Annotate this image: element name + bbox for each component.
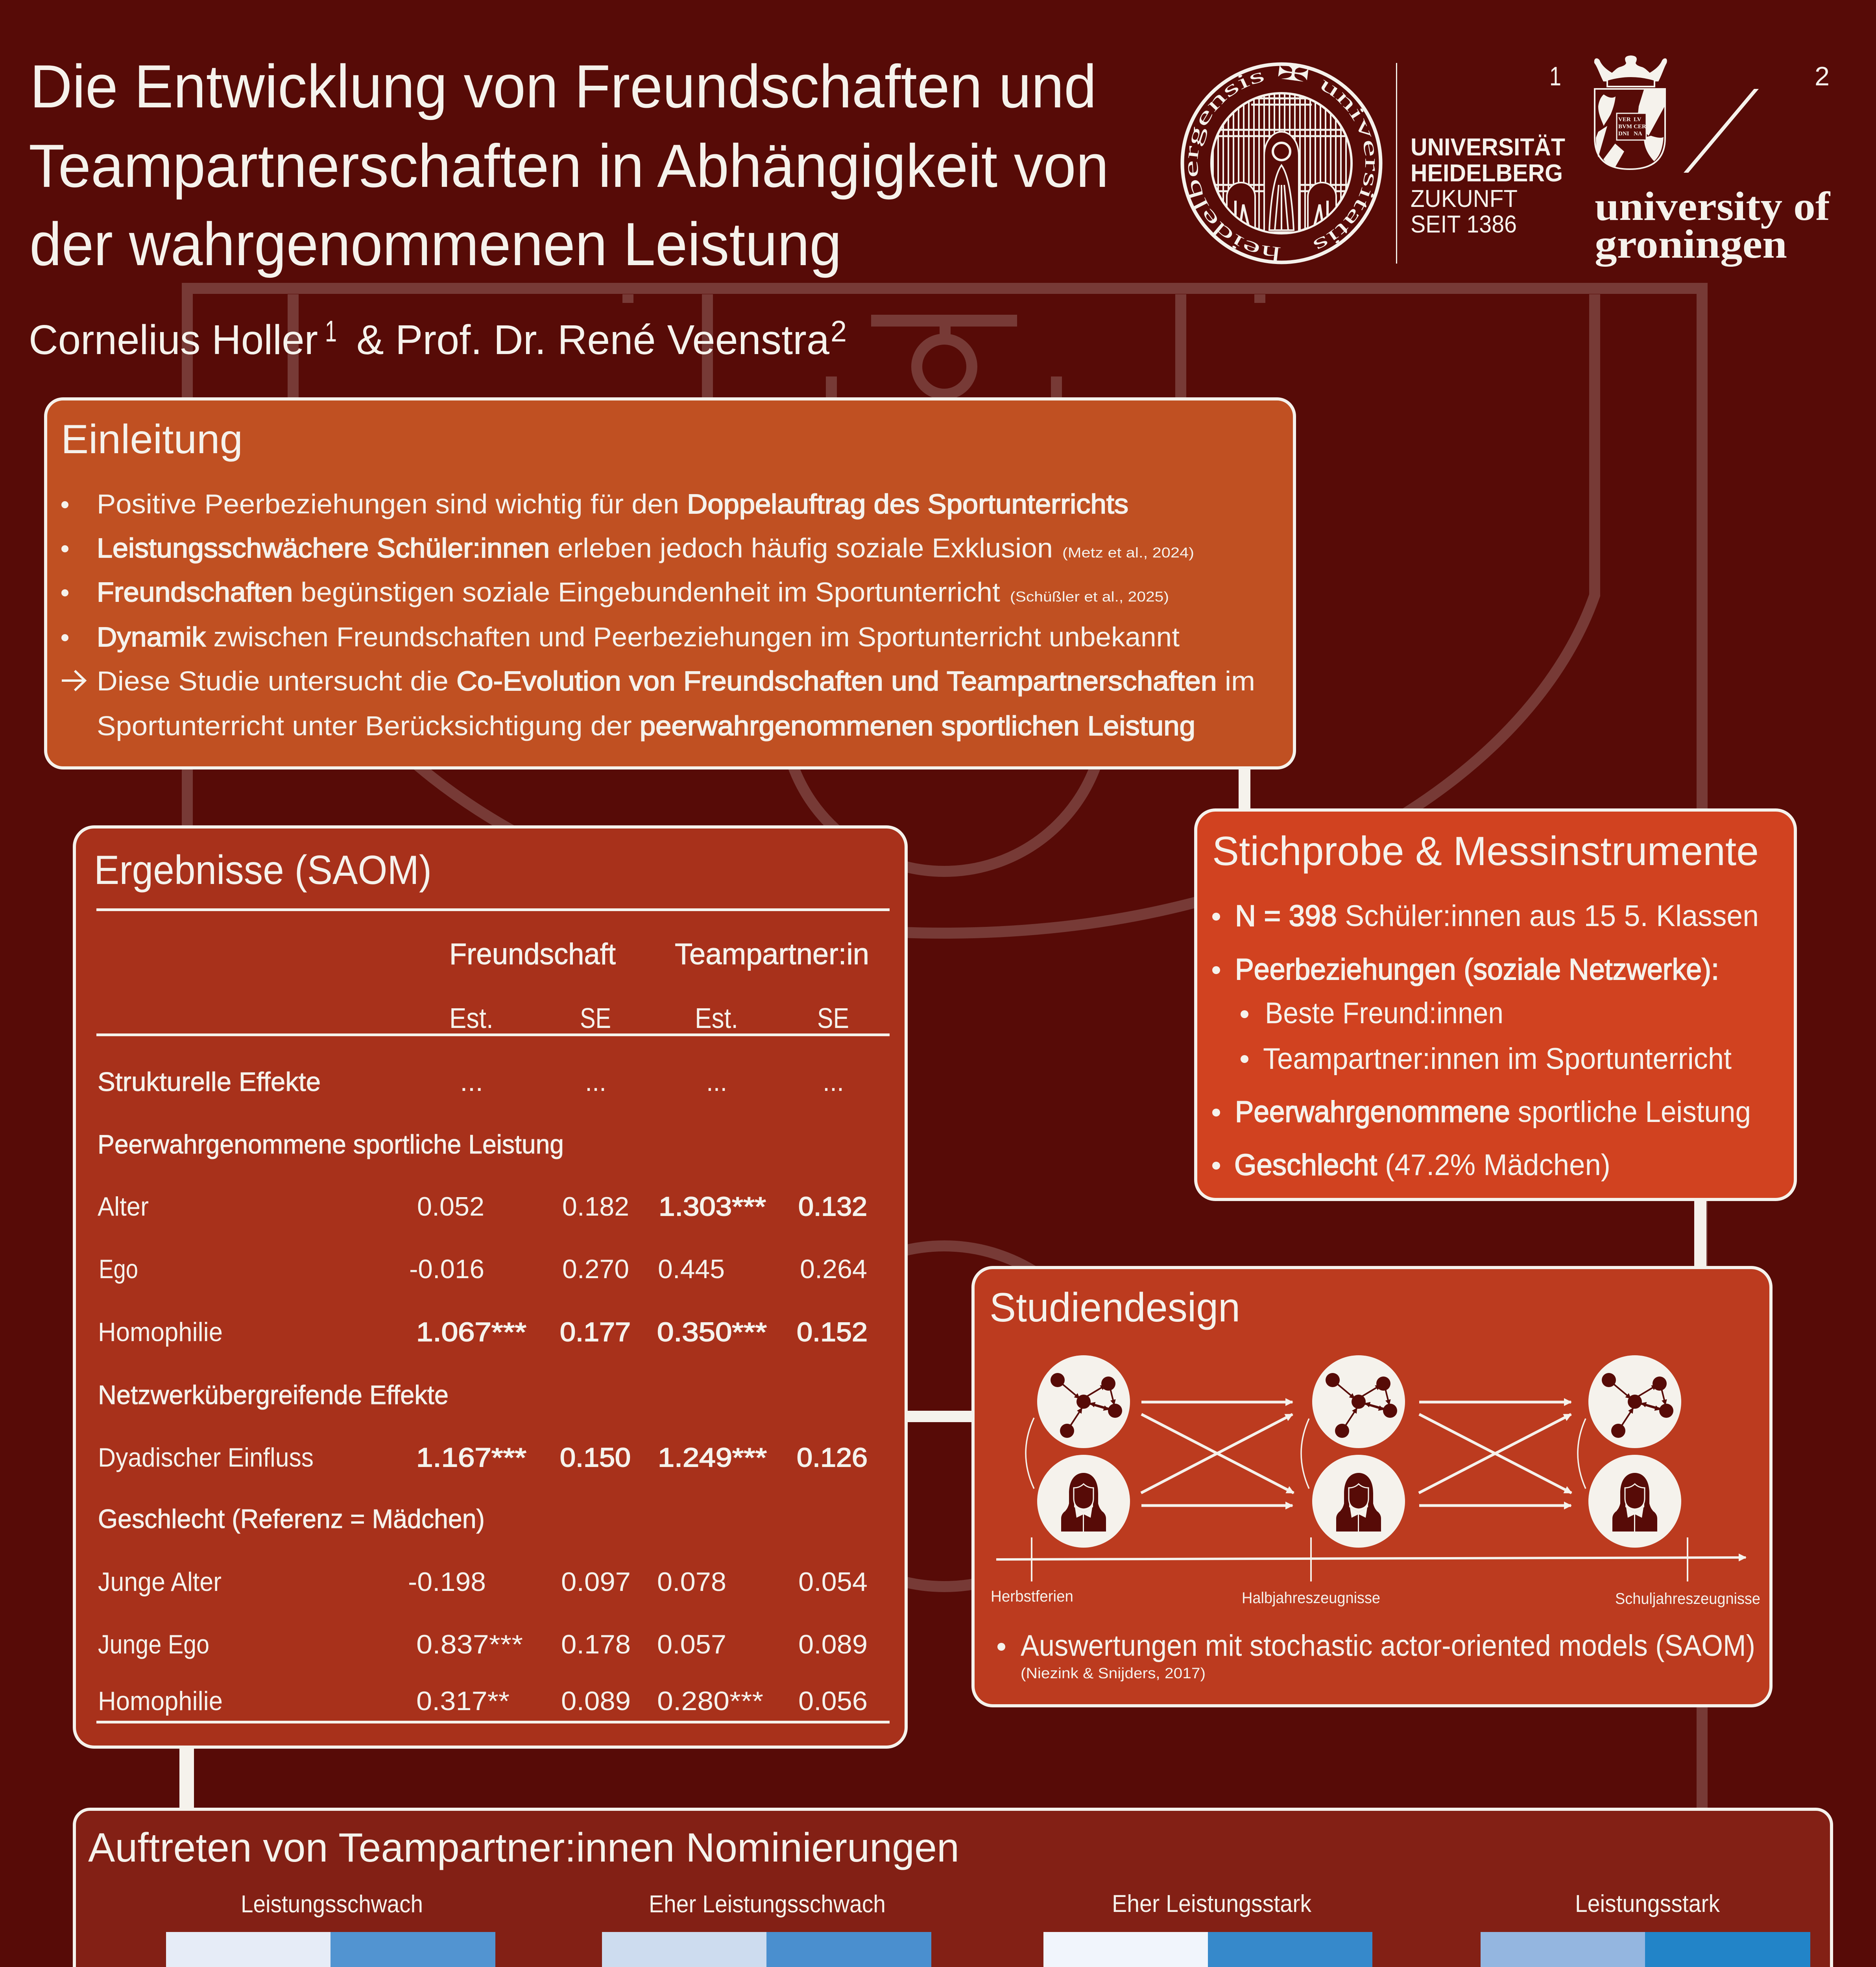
table: SAOM estimates: 0.126 xyxy=(797,1443,868,1472)
icon: person wave 1 xyxy=(1037,1455,1130,1548)
connectors between panels xyxy=(179,767,1706,1967)
panel: Ergebnisse SAOM xyxy=(74,827,906,1747)
title xyxy=(29,52,1109,278)
table: SAOM estimates: 0.350*** xyxy=(657,1317,767,1347)
logo: Groningen crest: CER xyxy=(1634,124,1646,130)
panel: Einleitung xyxy=(46,399,1294,768)
table: SAOM estimates: 0.177 xyxy=(560,1317,631,1347)
text block: sample bullets: Peerbeziehungen (soziale Netzwerke): xyxy=(1235,953,1719,986)
table: SAOM estimates: 0.182 xyxy=(562,1192,629,1222)
text block: analysis method xyxy=(997,1629,1755,1682)
text block: sample bullets: Teampartner:innen im Sportunterricht xyxy=(1263,1042,1732,1076)
logo: Groningen crest xyxy=(1594,55,1667,169)
table: SAOM estimates: Ego xyxy=(99,1254,138,1284)
title: Teampartnerschaften in Abhängigkeit von xyxy=(29,132,1109,200)
chart: heatmap Leistungsschwach: Leistungsschwach xyxy=(241,1891,423,1918)
chart: heatmap Leistungsschwach xyxy=(92,1891,495,1967)
authors xyxy=(29,315,847,363)
table: SAOM estimates: Homophilie xyxy=(98,1686,223,1716)
background: court lines xyxy=(187,288,1702,1967)
text block: introduction bullets: Freundschaften begünstigen soziale Eingebundenheit im Sportunterricht xyxy=(97,577,1000,607)
heading: Stichprobe: Stichprobe & Messinstrumente xyxy=(1212,829,1759,874)
text block: analysis method: Auswertungen mit stochastic actor-oriented models (SAOM) xyxy=(1021,1629,1755,1663)
authors: Cornelius Holler xyxy=(29,317,318,363)
table: SAOM estimates: SE xyxy=(817,1003,849,1034)
icon: person wave 2 xyxy=(1312,1455,1405,1548)
table: SAOM estimates: ... xyxy=(823,1067,844,1097)
text block: introduction bullets xyxy=(61,489,1255,741)
table: SAOM estimates: 1.249*** xyxy=(658,1443,767,1472)
chart: heatmap Leistungsstark: Leistungsstark xyxy=(1575,1890,1720,1917)
table: SAOM estimates: Junge Alter xyxy=(98,1567,222,1597)
logo: university of groningen wordmark: groningen xyxy=(1595,221,1787,267)
table: SAOM estimates: ... xyxy=(460,1067,483,1097)
logo: Groningen crest: DNI xyxy=(1618,131,1629,137)
chart: heatmap Eher Leistungsschwach: Eher Leistungsschwach xyxy=(649,1891,886,1918)
table: SAOM estimates: Est. xyxy=(449,1003,493,1034)
table: SAOM estimates: Alter xyxy=(98,1192,149,1222)
logo: Groningen crest: VER xyxy=(1618,116,1631,123)
logo: Universität Heidelberg wordmark: UNIVERSITÄT xyxy=(1411,134,1565,161)
logo: university of groningen wordmark xyxy=(1595,184,1830,267)
logo: Universität Heidelberg wordmark xyxy=(1411,134,1565,238)
chart: heatmap Eher Leistungsschwach xyxy=(529,1891,931,1967)
table: SAOM estimates: 0.132 xyxy=(798,1192,867,1222)
panel: Stichprobe und Messinstrumente xyxy=(1196,810,1795,1199)
table: SAOM estimates: 0.178 xyxy=(561,1629,631,1659)
timeline: Schuljahreszeugnisse xyxy=(1615,1590,1760,1607)
authors: & Prof. Dr. René Veenstra xyxy=(356,317,829,363)
title: der wahrgenommenen Leistung xyxy=(30,210,842,278)
table: SAOM estimates: Teampartner:in xyxy=(675,937,869,971)
table: SAOM estimates: 1.303*** xyxy=(659,1192,766,1222)
text block: introduction bullets: Leistungsschwächere Schüler:innen erleben jedoch häufig soziale Exklusion xyxy=(97,533,1053,563)
text block: introduction bullets: Positive Peerbeziehungen sind wichtig für den Doppelauftrag des Sportunterrichts xyxy=(97,489,1128,519)
logo: Groningen crest: NA xyxy=(1634,131,1642,137)
text block: introduction bullets: Dynamik zwischen Freundschaften und Peerbeziehungen im Sportunterricht unbekannt xyxy=(97,622,1180,652)
table: SAOM estimates: 0.054 xyxy=(798,1567,868,1597)
panel: Auftreten von Teampartner:innen Nominierungen xyxy=(74,1809,1832,1967)
table: SAOM estimates: Netzwerkübergreifende Effekte xyxy=(98,1380,449,1410)
timeline: Herbstferien xyxy=(991,1588,1073,1605)
divider xyxy=(1396,63,1397,264)
heading: Ergebnisse: Ergebnisse (SAOM) xyxy=(94,847,432,893)
icon: network wave 3 xyxy=(1588,1355,1681,1448)
table: SAOM estimates: 0.152 xyxy=(797,1317,868,1347)
table: SAOM estimates: -0.198 xyxy=(408,1567,486,1597)
text block: sample bullets: N = 398 Schüler:innen aus 15 5. Klassen xyxy=(1235,899,1759,933)
table: SAOM estimates: 0.837*** xyxy=(416,1629,523,1659)
table: SAOM estimates xyxy=(96,908,890,1723)
chart: heatmap Eher Leistungsstark: Eher Leistungsstark xyxy=(1112,1890,1312,1917)
table: SAOM estimates: Est. xyxy=(695,1003,738,1034)
text block: introduction bullets: (Schüßler et al., 2025) xyxy=(1010,589,1169,605)
chart: heatmap Eher Leistungsstark xyxy=(968,1890,1372,1967)
table: SAOM estimates: ... xyxy=(585,1067,606,1097)
heading: Auftreten: Auftreten von Teampartner:innen Nominierungen xyxy=(88,1825,959,1871)
table: SAOM estimates: 0.056 xyxy=(798,1686,868,1716)
table: SAOM estimates: Strukturelle Effekte xyxy=(98,1067,321,1097)
table: SAOM estimates: SE xyxy=(580,1003,611,1034)
icon: network wave 2 xyxy=(1312,1355,1405,1448)
table: SAOM estimates: ... xyxy=(706,1067,727,1097)
table: SAOM estimates: 0.089 xyxy=(561,1686,631,1716)
table: SAOM estimates: 0.317** xyxy=(416,1686,510,1716)
table: SAOM estimates: -0.016 xyxy=(409,1254,484,1284)
table: SAOM estimates: 0.097 xyxy=(561,1567,631,1597)
table: SAOM estimates: 0.089 xyxy=(798,1629,868,1659)
table: SAOM estimates: 0.057 xyxy=(657,1629,726,1659)
title: Die Entwicklung von Freundschaften und xyxy=(30,52,1097,120)
table: SAOM estimates: 0.052 xyxy=(417,1192,484,1222)
table: SAOM estimates: 1.067*** xyxy=(416,1317,526,1347)
table: SAOM estimates: Peerwahrgenommene sportliche Leistung xyxy=(98,1129,564,1159)
authors: 1 xyxy=(325,315,337,348)
table: SAOM estimates: 0.078 xyxy=(657,1567,726,1597)
table: SAOM estimates: 0.270 xyxy=(562,1254,629,1284)
heading: Studiendesign: Studiendesign xyxy=(990,1285,1240,1330)
logo: Universität Heidelberg wordmark: SEIT 1386 xyxy=(1411,211,1517,238)
logo: Universität Heidelberg wordmark: ZUKUNFT xyxy=(1411,185,1518,212)
affiliation number 2: 2 xyxy=(1815,61,1830,91)
table: SAOM estimates: Homophilie xyxy=(98,1317,223,1347)
heading: Einleitung: Einleitung xyxy=(61,417,243,462)
logo: slash xyxy=(1684,89,1759,173)
logo: Groningen crest: BVM xyxy=(1618,124,1632,130)
table: SAOM estimates: 1.167*** xyxy=(416,1443,526,1472)
text block: sample bullets xyxy=(1212,899,1759,1182)
text block: analysis method: (Niezink & Snijders, 2017) xyxy=(1021,1665,1206,1682)
timeline xyxy=(991,1537,1760,1607)
timeline: Halbjahreszeugnisse xyxy=(1242,1589,1380,1607)
table: SAOM estimates: Geschlecht (Referenz = Mädchen) xyxy=(98,1504,485,1534)
text block: introduction bullets: Sportunterricht unter Berücksichtigung der peerwahrgenommenen sportlichen Leistung xyxy=(97,710,1195,741)
text block: sample bullets: Peerwahrgenommene sportliche Leistung xyxy=(1235,1095,1751,1129)
icon: network wave 1 xyxy=(1037,1355,1130,1448)
text block: sample bullets: Geschlecht (47.2% Mädchen) xyxy=(1234,1148,1610,1182)
table: SAOM estimates: 0.280*** xyxy=(657,1686,763,1716)
table: SAOM estimates: Freundschaft xyxy=(449,937,616,971)
text block: introduction bullets: (Metz et al., 2024) xyxy=(1062,544,1194,561)
panel: Studiendesign xyxy=(973,1268,1771,1706)
table: SAOM estimates: Dyadischer Einfluss xyxy=(98,1443,314,1472)
text block: sample bullets: Beste Freund:innen xyxy=(1265,996,1503,1030)
arrows: within-wave correlations xyxy=(1026,1418,1586,1489)
logo: Groningen crest: LV xyxy=(1634,116,1642,123)
table: SAOM estimates: 0.264 xyxy=(800,1254,867,1284)
table: SAOM estimates: 0.150 xyxy=(560,1443,631,1472)
chart: heatmap Leistungsstark xyxy=(1405,1890,1810,1967)
text block: introduction bullets: Diese Studie untersucht die Co-Evolution von Freundschaften und Teampartnerschaften im xyxy=(97,666,1255,696)
table: SAOM estimates: Junge Ego xyxy=(98,1629,209,1659)
authors: 2 xyxy=(831,315,847,348)
arrows: cross-lagged paths xyxy=(1141,1402,1571,1506)
icon: person wave 3 xyxy=(1588,1455,1681,1548)
logo: university of groningen wordmark: university of xyxy=(1595,184,1830,229)
logo: Universität Heidelberg wordmark: HEIDELBERG xyxy=(1411,160,1563,187)
logo: Heidelberg seal: heidelbergensis ✠ universitatis xyxy=(1180,61,1383,265)
affiliation number 1: 1 xyxy=(1549,61,1561,91)
table: SAOM estimates: 0.445 xyxy=(658,1254,725,1284)
